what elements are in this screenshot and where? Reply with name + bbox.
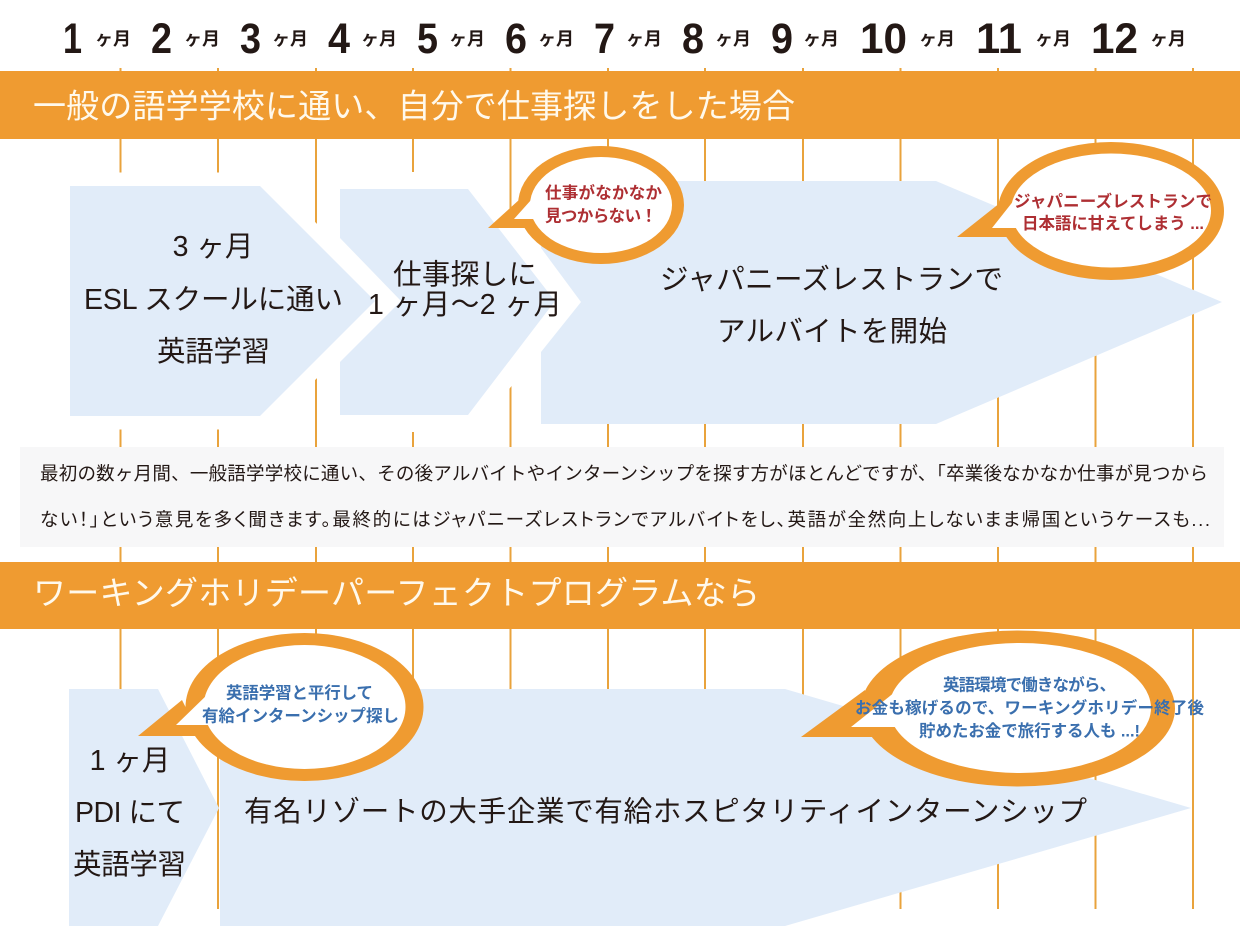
arrow: 1 month PDI: [69, 689, 219, 926]
callout: cannot find a job: [488, 146, 684, 264]
arrow: job search: [340, 189, 562, 415]
month axis: 9: [771, 15, 793, 63]
arrow: 3 months ESL school: 3 ヶ月: [173, 231, 253, 263]
panel: explanation text: [20, 447, 1224, 547]
callout: paid internship search: [138, 633, 424, 781]
heading: perfect program: ワーキングホリデーパーフェクトプログラムなら: [33, 574, 760, 612]
month axis: 12: [1091, 15, 1138, 63]
arrow: 3 months ESL school: [70, 186, 375, 416]
panel: explanation text: ない！」という意見を多く聞きます。最終的にはジャパニーズレストランでアルバイトをし、英語が全然向上しないまま帰国というケースも...: [40, 509, 1210, 530]
callout: earn money and travel: 英語環境で働きながら、: [943, 674, 1116, 694]
callout: relying on Japanese: [957, 142, 1224, 280]
callout: earn money and travel: お金も稼げるので、ワーキングホリデー終了後: [855, 698, 1204, 718]
month axis: ヶ月: [1035, 29, 1071, 49]
arrow: 3 months ESL school: 英語学習: [157, 336, 270, 368]
callout: paid internship search: 有給インターンシップ探し: [202, 706, 399, 726]
month axis: 4: [328, 15, 350, 63]
callout: relying on Japanese: 日本語に甘えてしまう ...: [1022, 214, 1204, 233]
month axis: ヶ月: [184, 29, 220, 49]
heading: general language school: 一般の語学学校に通い、自分で仕事探しをした場合: [33, 88, 795, 124]
month axis: 5: [417, 15, 438, 63]
callout: earn money and travel: [801, 630, 1204, 786]
arrow: paid hospitality internship: [220, 689, 1191, 926]
month axis: ヶ月: [449, 29, 485, 49]
month axis: ヶ月: [626, 29, 662, 49]
callout: cannot find a job: 仕事がなかなか: [545, 182, 662, 202]
arrow: Japanese restaurant job: アルバイトを開始: [717, 316, 947, 348]
month axis: 6: [505, 15, 527, 63]
month axis: ヶ月: [538, 29, 574, 49]
month axis: ヶ月: [919, 29, 955, 49]
month axis: [63, 15, 1186, 63]
arrow: job search: 仕事探しに: [393, 259, 537, 291]
arrow: Japanese restaurant job: ジャパニーズレストランで: [660, 264, 1003, 296]
arrow: Japanese restaurant job: [541, 181, 1222, 424]
heading: perfect program: [0, 562, 1240, 629]
month axis: ヶ月: [361, 29, 397, 49]
callout: relying on Japanese: ジャパニーズレストランで: [1014, 191, 1212, 211]
month axis: 11: [976, 15, 1022, 63]
arrow: paid hospitality internship: 有名リゾートの大手企業で有給ホスピタリティインターンシップ: [244, 796, 1087, 828]
month axis: 10: [860, 15, 907, 63]
heading: general language school: [0, 71, 1240, 139]
month axis: ヶ月: [95, 29, 131, 49]
arrow: job search: 1 ヶ月〜2 ヶ月: [368, 289, 562, 321]
month axis: ヶ月: [715, 29, 751, 49]
month axis: 3: [240, 15, 261, 63]
month axis: 7: [594, 15, 615, 63]
arrow: 1 month PDI: PDI にて: [75, 797, 185, 829]
month axis: 8: [682, 15, 704, 63]
month axis: ヶ月: [1150, 29, 1186, 49]
arrow: 1 month PDI: 1 ヶ月: [90, 745, 170, 777]
arrow: 3 months ESL school: ESL スクールに通い: [84, 284, 343, 316]
month axis: 1: [63, 15, 82, 63]
callout: cannot find a job: 見つからない！: [545, 206, 657, 226]
month axis: ヶ月: [803, 29, 839, 49]
month axis: ヶ月: [272, 29, 308, 49]
panel: explanation text: 最初の数ヶ月間、一般語学学校に通い、その後アルバイトやインターンシップを探す方がほとんどですが、「卒業後なかなか仕事が見つから: [40, 463, 1208, 484]
callout: paid internship search: 英語学習と平行して: [226, 682, 373, 702]
callout: earn money and travel: 貯めたお金で旅行する人も ...!: [919, 720, 1140, 740]
arrow: 1 month PDI: 英語学習: [73, 849, 186, 881]
month axis: 2: [151, 15, 172, 63]
